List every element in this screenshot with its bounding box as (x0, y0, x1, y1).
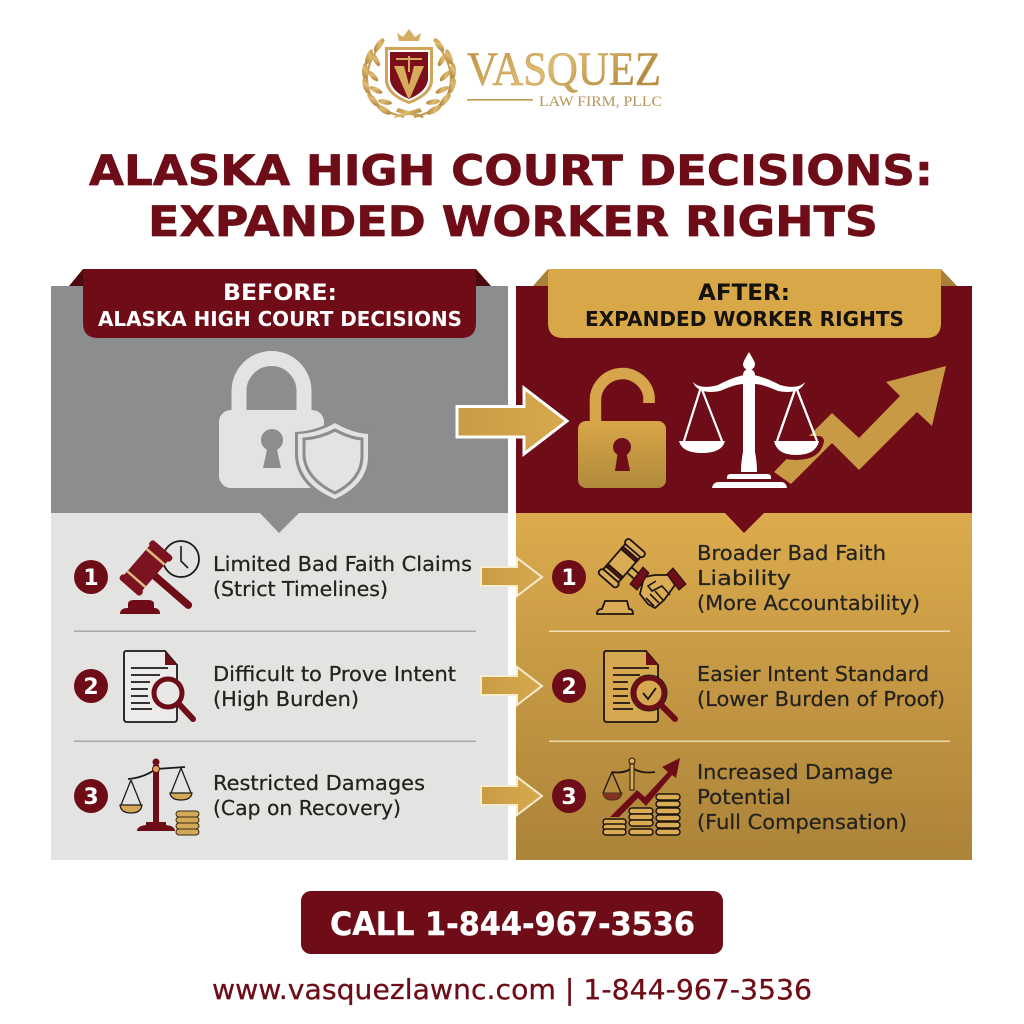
arrow: row 1 (481, 558, 542, 596)
number 1: 1 (83, 566, 99, 591)
logo (361, 29, 662, 118)
title: ALASKA HIGH COURT DECISIONS: (89, 146, 933, 195)
text: Limited Bad Faith Claims (213, 552, 472, 576)
text: Potential (697, 785, 791, 809)
row 3 before (74, 758, 425, 835)
text: Difficult to Prove Intent (213, 662, 456, 686)
text: (Cap on Recovery) (213, 796, 401, 820)
title: EXPANDED WORKER RIGHTS (148, 197, 878, 246)
logo subtitle: LAW FIRM, PLLC (539, 94, 662, 110)
text: Easier Intent Standard (697, 662, 929, 686)
panel: before (51, 269, 508, 860)
icon: gavel and handshake (597, 538, 686, 614)
text (697, 662, 945, 711)
icon: document and check magnifier (604, 651, 675, 722)
row 2 after (552, 651, 945, 722)
number 2 (74, 669, 108, 703)
text: Restricted Damages (213, 771, 425, 795)
text: (More Accountability) (697, 591, 920, 615)
panel: after (516, 269, 972, 860)
before banner (69, 269, 491, 338)
number 2 (552, 669, 586, 703)
arrow: row 3 (481, 777, 542, 815)
icon: rising arrow (774, 366, 946, 484)
after banner: EXPANDED WORKER RIGHTS (585, 307, 904, 331)
icon: scales of justice (679, 352, 819, 488)
number 3: 3 (83, 785, 99, 810)
text (213, 662, 456, 711)
text (697, 541, 920, 615)
icon: scales and coins (120, 758, 199, 835)
icon: laurel wreath (361, 37, 457, 118)
icon: document and magnifier (124, 651, 193, 722)
number 3 (74, 779, 108, 813)
number 1 (552, 560, 586, 594)
before banner: ALASKA HIGH COURT DECISIONS (98, 307, 462, 331)
text: (Lower Burden of Proof) (697, 687, 945, 711)
text: Broader Bad Faith (697, 541, 886, 565)
icon: crown (397, 29, 421, 41)
row 1 after (552, 538, 920, 615)
logo wordmark: VASQUEZ (467, 43, 661, 96)
icon: closed lock with shield (219, 358, 372, 502)
text: Liability (697, 566, 791, 590)
before banner: BEFORE: (223, 281, 337, 306)
icon: shield (385, 47, 433, 104)
text: Increased Damage (697, 760, 893, 784)
title (89, 146, 933, 246)
arrow: row 2 (481, 667, 542, 705)
text: (High Burden) (213, 687, 359, 711)
row 1 before (74, 539, 472, 627)
number 1 (74, 560, 108, 594)
number 2: 2 (83, 675, 99, 700)
call button: CALL 1-844-967-3536 (330, 905, 695, 943)
row 2 before (74, 651, 456, 722)
number 2: 2 (561, 675, 577, 700)
text (697, 760, 907, 834)
call button (301, 891, 723, 954)
text: (Full Compensation) (697, 810, 907, 834)
icon: open lock (578, 374, 666, 488)
arrow: before to after (457, 388, 567, 454)
text: (Strict Timelines) (213, 577, 388, 601)
text (213, 552, 472, 601)
number 3 (552, 779, 586, 813)
footer contact line: www.vasquezlawnc.com | 1-844-967-3536 (212, 973, 812, 1006)
row 3 after (552, 758, 907, 835)
icon: scales, rising arrow and coins (603, 758, 680, 835)
number 1: 1 (561, 566, 577, 591)
icon: gavel and clock (118, 539, 208, 627)
after banner (533, 269, 957, 338)
number 3: 3 (561, 785, 577, 810)
text (213, 771, 425, 820)
after banner: AFTER: (698, 281, 790, 306)
